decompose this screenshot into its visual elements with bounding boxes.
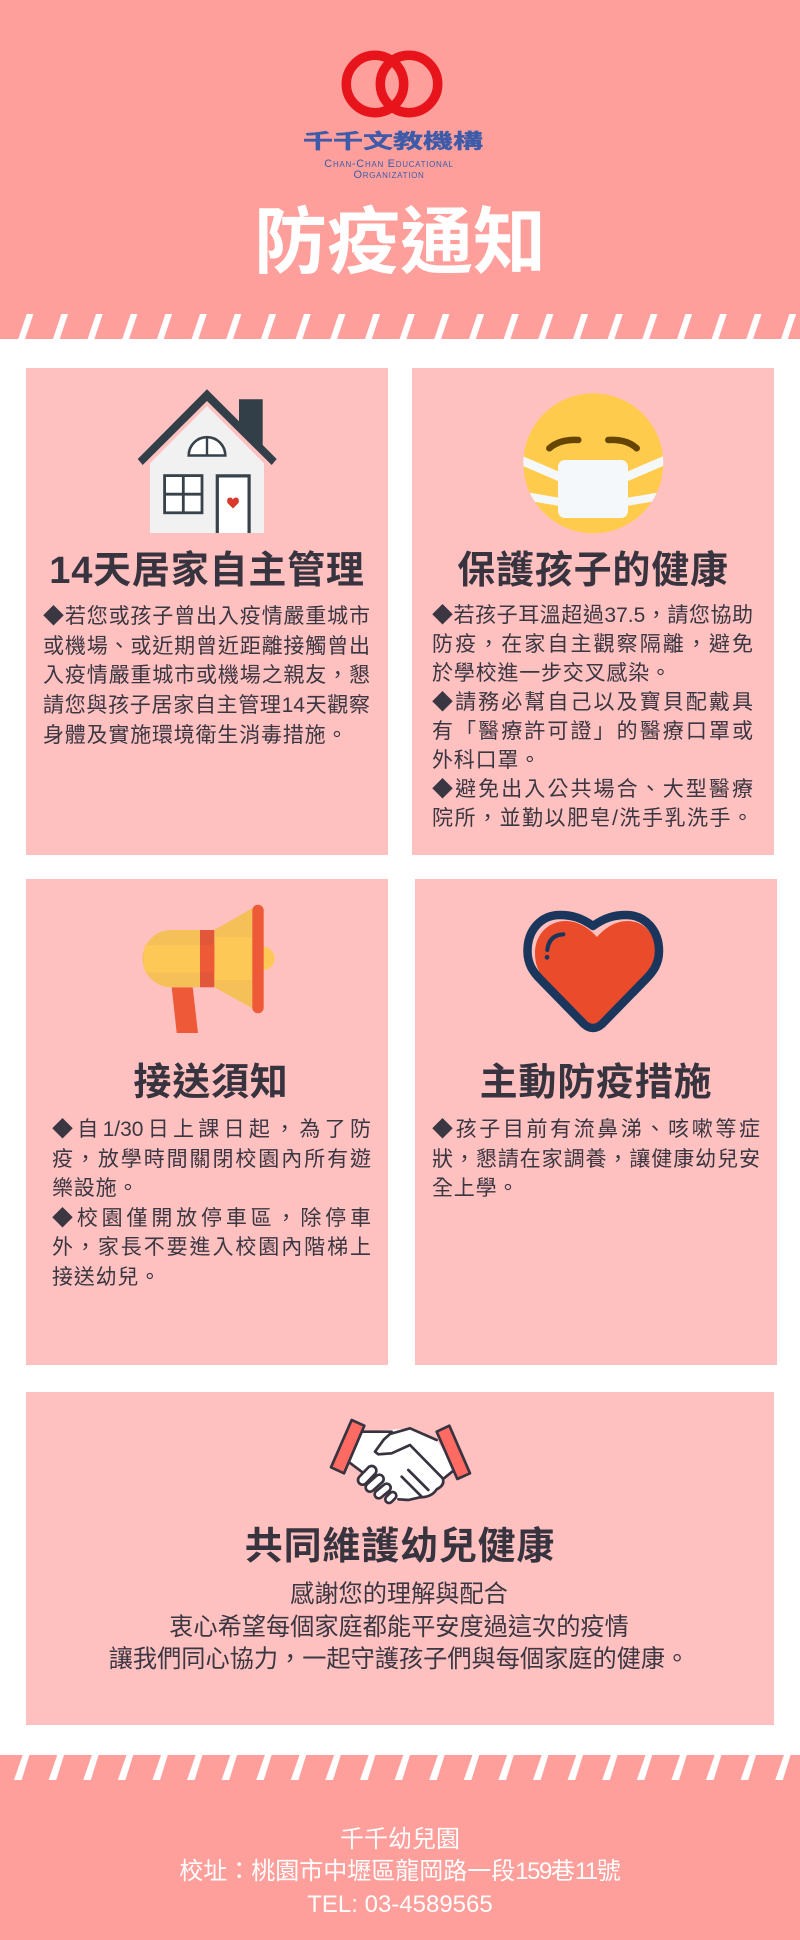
logo English name: Chan-Chan Educational: [324, 158, 454, 170]
body text: 接送幼兒。: [52, 1266, 161, 1289]
body text: [432, 1118, 760, 1200]
body text: 身體及實施環境衛生消毒措施。: [43, 724, 348, 747]
closing message: 讓我們同心協力，一起守護孩子們與每個家庭的健康。: [109, 1646, 689, 1673]
body text: 院所，並勤以肥皂/洗手乳洗手。: [432, 807, 753, 830]
panel: protect children's health: [412, 368, 774, 855]
body text: 入疫情嚴重城市或機場之親友，懇: [43, 664, 370, 687]
body text: 疫，放學時間關閉校園內所有遊: [52, 1148, 371, 1171]
address: 校址：桃園市中壢區龍岡路一段159巷11號: [179, 1858, 621, 1885]
heading: 14天居家自主管理: [49, 550, 365, 592]
body text: ◆若您或孩子曾出入疫情嚴重城市: [43, 605, 370, 628]
body text: ◆請務必幫自己以及寶貝配戴具: [432, 691, 753, 714]
body text: 請您與孩子居家自主管理14天觀察: [43, 694, 370, 717]
footer band: [0, 1755, 800, 1940]
body text: ◆自1/30日上課日起，為了防: [52, 1118, 371, 1141]
body text: 有「醫療許可證」的醫療口罩或: [432, 720, 753, 743]
icon: masked face: [523, 393, 664, 534]
heading: 共同維護幼兒健康: [245, 1526, 555, 1568]
body text: 狀，懇請在家調養，讓健康幼兒安: [432, 1148, 760, 1170]
body text: ◆校園僅開放停車區，除停車: [52, 1207, 371, 1230]
school name: 千千幼兒園: [340, 1826, 460, 1853]
logo Chinese name: 千千文教機構: [303, 131, 483, 153]
heading: 接送須知: [133, 1062, 289, 1104]
panel: home self-management: [26, 368, 388, 855]
icon: heart: [523, 910, 664, 1032]
panel: protect together: [26, 1392, 774, 1725]
body text: ◆若孩子耳溫超過37.5，請您協助: [432, 604, 753, 627]
body text: [43, 605, 370, 747]
logo English name: [324, 158, 454, 180]
panel: pickup notice: [26, 879, 388, 1365]
icon: handshake: [330, 1418, 472, 1504]
body text: 於學校進一步交叉感染。: [432, 662, 672, 685]
body text: 外科口罩。: [432, 749, 541, 772]
body text: [432, 604, 753, 830]
logo: interlocking red rings: [342, 50, 442, 118]
title: 防疫通知: [254, 202, 546, 283]
heading: 保護孩子的健康: [457, 550, 729, 592]
closing message: 感謝您的理解與配合: [290, 1581, 508, 1608]
body text: ◆孩子目前有流鼻涕、咳嗽等症: [432, 1118, 760, 1141]
body text: ◆避免出入公共場合、大型醫療: [432, 778, 753, 801]
icon: house: [138, 389, 277, 533]
telephone: TEL: 03-4589565: [307, 1891, 493, 1918]
icon: megaphone: [142, 904, 275, 1033]
body text: 防疫，在家自主觀察隔離，避免: [432, 633, 753, 656]
header stripes: [18, 314, 796, 339]
heading: 主動防疫措施: [480, 1062, 712, 1104]
logo English name: Organization: [353, 168, 425, 180]
footer stripes: [14, 1755, 791, 1780]
closing message: [109, 1581, 689, 1673]
body text: 全上學。: [432, 1177, 519, 1200]
body text: 或機場、或近期曾近距離接觸曾出: [43, 635, 370, 658]
header band: [0, 0, 800, 339]
body text: 外，家長不要進入校園內階梯上: [52, 1236, 371, 1259]
closing message: 衷心希望每個家庭都能平安度過這次的疫情: [169, 1614, 629, 1640]
body text: 樂設施。: [52, 1177, 139, 1200]
panel: active prevention: [415, 879, 777, 1365]
body text: [52, 1118, 371, 1289]
